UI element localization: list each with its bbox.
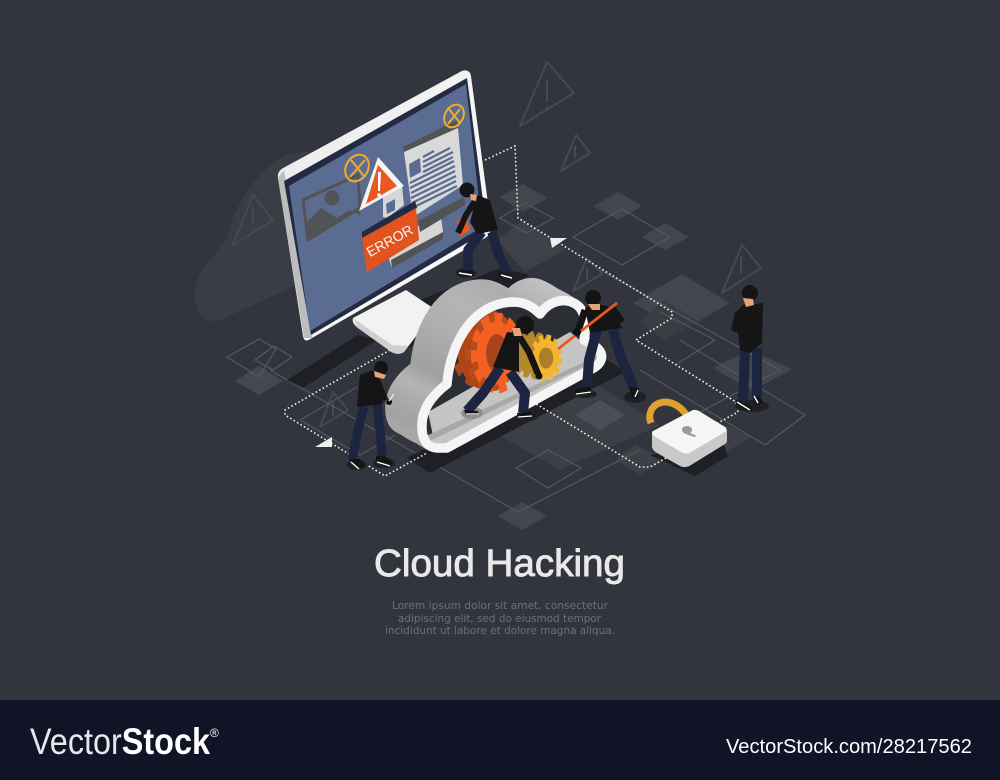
registered mark: ® bbox=[210, 726, 219, 740]
close icon right bbox=[440, 101, 468, 131]
orange gear bbox=[455, 312, 519, 388]
description: incididunt ut labore et dolore magna aliqua. bbox=[385, 625, 615, 637]
dotted connection paths bbox=[285, 146, 738, 476]
description: Lorem ipsum dolor sit amet, consectetur bbox=[392, 600, 609, 612]
padlock shackle bbox=[650, 402, 686, 423]
hacker with crowbar bbox=[558, 290, 646, 403]
hacker turning the gear bbox=[461, 316, 542, 421]
floor outline grid bbox=[227, 203, 805, 512]
small document behind the warning bbox=[383, 186, 404, 218]
close icon left bbox=[340, 150, 374, 186]
floor diamonds bbox=[235, 184, 792, 530]
title: Cloud Hacking bbox=[374, 543, 625, 585]
footer logo: VectorStock bbox=[30, 721, 210, 762]
floor shadows bbox=[287, 268, 728, 476]
padlock keyhole bbox=[682, 426, 697, 437]
cloud floor bbox=[428, 332, 597, 433]
cloud extrusion bbox=[390, 283, 600, 447]
hacker with phone bbox=[347, 361, 395, 470]
footer bar bbox=[0, 700, 1000, 780]
padlock body bbox=[652, 430, 727, 467]
padlock bbox=[650, 402, 728, 476]
monitor frame bbox=[278, 70, 491, 340]
background decoration: warning triangles bbox=[233, 62, 761, 427]
cloud opening bbox=[422, 301, 602, 448]
arrowheads on dotted paths bbox=[315, 238, 567, 447]
hacker on the monitor bbox=[456, 182, 518, 281]
lower window bbox=[389, 217, 443, 268]
monitor screen bbox=[289, 84, 482, 331]
document window bbox=[403, 120, 463, 217]
description bbox=[385, 600, 615, 637]
cloud bbox=[390, 283, 610, 455]
error banner bbox=[362, 201, 419, 272]
error banner: ERROR bbox=[364, 221, 416, 260]
cloud front rim bbox=[422, 301, 602, 448]
monitor bbox=[278, 70, 491, 354]
footer image id: VectorStock.com/28217562 bbox=[726, 736, 972, 758]
description: adipiscing elit, sed do eiusmod tempor bbox=[398, 613, 602, 625]
image window bbox=[303, 175, 361, 240]
background decoration: faint cloud bbox=[195, 152, 330, 321]
gold gear bbox=[514, 334, 560, 378]
warning triangle bbox=[359, 157, 404, 211]
standing hacker watching bbox=[731, 285, 769, 412]
monitor stand bbox=[353, 290, 436, 354]
